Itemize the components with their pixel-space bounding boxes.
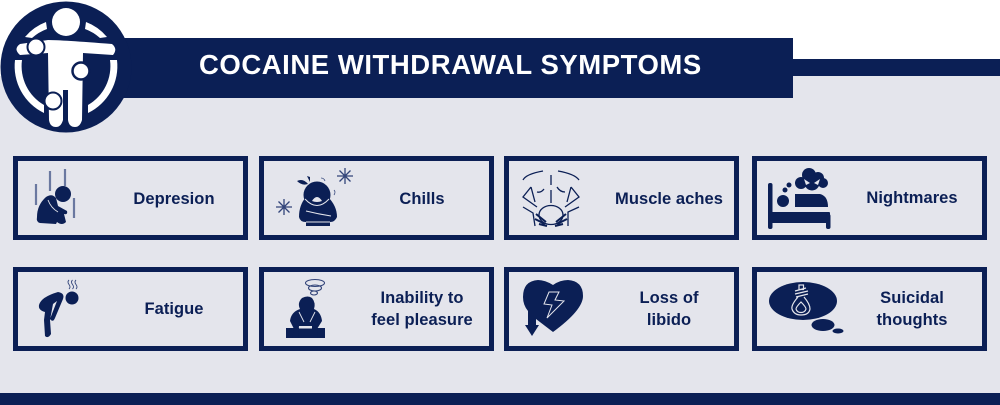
label: Suicidal thoughts xyxy=(876,289,947,329)
label: Inability to feel pleasure: feel pleasure xyxy=(371,311,473,329)
icon: sad seated person xyxy=(286,279,325,338)
panel: Inability to feel pleasure xyxy=(259,266,494,350)
panel: Chills xyxy=(259,156,494,240)
panel: Muscle aches xyxy=(504,156,739,240)
label: Suicidal thoughts: Suicidal xyxy=(880,289,944,307)
icon: back muscles xyxy=(522,170,580,227)
icon: bed with nightmare cloud xyxy=(768,168,830,229)
panel: Depresion xyxy=(13,156,248,240)
label: Chills: Chills xyxy=(399,190,445,208)
label: Fatigue: Fatigue xyxy=(144,300,204,318)
icon: shivering person xyxy=(276,168,353,226)
icon: heart with down arrow xyxy=(523,280,583,336)
label: Suicidal thoughts: thoughts xyxy=(877,311,947,329)
label: Muscle aches: Muscle aches xyxy=(615,190,723,208)
label: Loss of libido: libido xyxy=(647,311,691,329)
label: Depresion: Depresion xyxy=(133,190,215,208)
panel: Fatigue xyxy=(13,266,248,350)
panel: Suicidal thoughts xyxy=(752,266,987,350)
label: Loss of libido: Loss of xyxy=(639,289,699,307)
icon: body with pain points xyxy=(0,2,125,132)
bottom bar xyxy=(0,393,1000,405)
icon: thought bubble with noose xyxy=(769,282,844,334)
panel: Loss of libido xyxy=(504,266,739,350)
label: Loss of libido xyxy=(639,289,699,329)
right header bar xyxy=(780,59,1000,76)
label: Nightmares: Nightmares xyxy=(866,189,958,207)
label: Inability to feel pleasure: Inability to xyxy=(380,289,464,307)
header banner xyxy=(100,38,793,98)
panel: Nightmares xyxy=(752,156,987,240)
title: COCAINE WITHDRAWAL SYMPTOMS xyxy=(199,49,702,80)
icon: tired person xyxy=(38,280,78,338)
icon: depressed person xyxy=(34,169,76,224)
label: Inability to feel pleasure xyxy=(371,289,473,329)
